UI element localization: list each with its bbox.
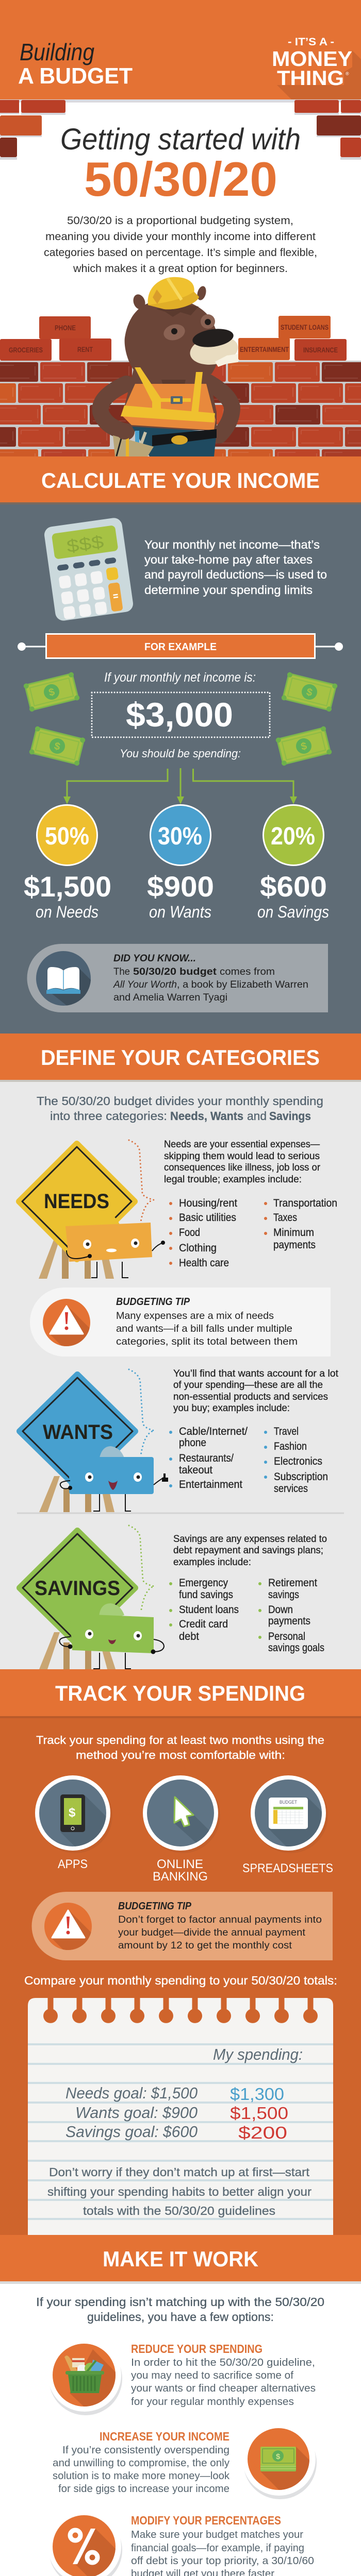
hard hat bbox=[148, 277, 199, 309]
option: increase your income bbox=[53, 2428, 317, 2499]
icon: cash stack: $ bbox=[276, 2452, 281, 2461]
callout: did you know: All Your Worth bbox=[113, 979, 177, 990]
notepad note: shifting your spending habits to better align your bbox=[47, 2185, 311, 2198]
wants split bbox=[147, 805, 214, 921]
handwritten amounts bbox=[230, 2084, 288, 2142]
icon: phone bbox=[60, 1794, 85, 1832]
needs split bbox=[24, 805, 111, 921]
savings description bbox=[173, 1534, 327, 1568]
method: spreadsheets bbox=[243, 1775, 333, 1872]
wants list: takeout bbox=[179, 1464, 212, 1476]
make it work intro: If your spending isn’t matching up with the 50/30/20 bbox=[36, 2295, 324, 2309]
needs sign character: NEEDS bbox=[44, 1190, 109, 1213]
my spending table: Wants goal: $900 bbox=[75, 2104, 198, 2122]
icon: warning bbox=[43, 1299, 90, 1346]
needs description: skipping them would lead to serious bbox=[164, 1151, 320, 1162]
intro paragraph bbox=[44, 215, 317, 275]
make it work intro: guidelines, you have a few options: bbox=[87, 2310, 274, 2324]
brick: phone: PHONE bbox=[55, 324, 76, 332]
notepad note: totals with the 50/30/20 guidelines bbox=[83, 2204, 275, 2217]
needs list: Housing/rent bbox=[179, 1197, 237, 1209]
callout: budgeting tip 1: categories, split its total between them bbox=[116, 1336, 298, 1347]
icon: calculator: $$$ bbox=[65, 532, 105, 556]
monthly income example bbox=[92, 670, 270, 737]
trousers and belt bbox=[132, 427, 217, 456]
option: modify your percentages: financial goals—for example, if paying bbox=[131, 2543, 304, 2554]
categories intro: Savings bbox=[269, 1109, 311, 1123]
wants list: phone bbox=[179, 1437, 206, 1449]
make it work intro bbox=[36, 2295, 324, 2324]
savings list: debt bbox=[179, 1631, 199, 1642]
income explanation text: and payroll deductions—is used to bbox=[144, 568, 327, 581]
icon: budget spreadsheet bbox=[269, 1798, 308, 1829]
method: online banking: ONLINE bbox=[157, 1857, 203, 1871]
icon: budget spreadsheet: BUDGET bbox=[280, 1800, 297, 1805]
section band: track your spending bbox=[0, 1669, 361, 1716]
callout: did you know: and Amelia Warren Tyagi bbox=[113, 992, 227, 1003]
savings list: payments bbox=[268, 1615, 310, 1627]
decorative corner bricks bbox=[0, 99, 361, 160]
needs split: on Needs bbox=[36, 903, 99, 921]
section band: define your categories bbox=[0, 1033, 361, 1080]
option: modify your percentages: Make sure your budget matches your bbox=[131, 2529, 303, 2540]
wants list bbox=[169, 1426, 328, 1495]
option: increase your income: INCREASE YOUR INCOME bbox=[100, 2430, 229, 2443]
safety vest bbox=[121, 367, 216, 430]
my spending table: My spending: bbox=[213, 2045, 303, 2063]
icon: grocery basket bbox=[50, 2344, 122, 2415]
icon: calculator bbox=[43, 517, 134, 622]
icon: cash stack bbox=[244, 2428, 317, 2499]
needs list: Health care bbox=[179, 1257, 229, 1269]
categories intro: Wants bbox=[210, 1109, 243, 1123]
intro paragraph: which makes it a great option for beginners. bbox=[73, 263, 288, 275]
wants sign character: WANTS bbox=[43, 1421, 113, 1444]
brick: groceries bbox=[0, 339, 52, 361]
savings list: Personal bbox=[268, 1631, 305, 1642]
header title: Building bbox=[20, 39, 94, 65]
callout: budgeting tip 2: your budget—divide the annual payment bbox=[118, 1927, 306, 1938]
savings split bbox=[257, 805, 329, 921]
brick: entertainment: ENTERTAINMENT bbox=[240, 345, 289, 353]
tracking intro: method you’re most comfortable with: bbox=[76, 1749, 285, 1761]
header title: A BUDGET bbox=[18, 63, 133, 89]
panel: make it work bbox=[0, 2235, 361, 2576]
needs split: 50% bbox=[45, 823, 89, 850]
needs description bbox=[164, 1139, 321, 1185]
for example banner: FOR EXAMPLE bbox=[144, 641, 217, 653]
needs split: $1,500 bbox=[24, 870, 111, 903]
wants list: Electronics bbox=[274, 1455, 322, 1467]
for example banner bbox=[18, 634, 343, 658]
income explanation text: determine your spending limits bbox=[144, 583, 313, 597]
monthly income example: $3,000 bbox=[126, 696, 233, 734]
logo: It's a Money Thing: MONEY bbox=[272, 47, 352, 71]
my spending table: Needs goal: $1,500 bbox=[65, 2084, 198, 2102]
tool pouch bbox=[113, 424, 154, 456]
needs list: Basic utilities bbox=[179, 1212, 236, 1224]
callout: budgeting tip 2: amount by 12 to get the monthly cost bbox=[118, 1940, 292, 1951]
compare heading: Compare your monthly spending to your 50/30/20 totals: bbox=[24, 1974, 337, 1987]
savings description: debt repayment and savings plans; bbox=[173, 1545, 323, 1556]
handwritten amounts: $200 bbox=[238, 2123, 287, 2142]
wants description: non-essential products and services bbox=[173, 1392, 328, 1402]
logo: It's a Money Thing bbox=[272, 36, 361, 99]
title bbox=[60, 123, 301, 206]
wants description: you buy; examples include: bbox=[173, 1403, 290, 1414]
icon: book bbox=[36, 951, 91, 1006]
wants list: Restaurants/ bbox=[179, 1452, 234, 1464]
wants description bbox=[173, 1368, 339, 1414]
method: online banking: BANKING bbox=[153, 1870, 208, 1884]
section band: make it work bbox=[0, 2235, 361, 2281]
callout: budgeting tip 2: Don’t forget to factor annual payments into bbox=[118, 1914, 322, 1925]
panel: track your spending bbox=[0, 1669, 361, 2235]
needs list: Clothing bbox=[179, 1242, 217, 1254]
needs list bbox=[169, 1197, 337, 1269]
callout: budgeting tip 1: and wants—if a bill falls under multiple bbox=[116, 1323, 292, 1334]
you should be spending: You should be spending: bbox=[120, 747, 241, 760]
panel: define your categories bbox=[0, 1033, 361, 1669]
panel: calculate your income bbox=[0, 502, 361, 1033]
option: increase your income: solution is to make more money—look bbox=[53, 2470, 230, 2482]
option: reduce your spending: REDUCE YOUR SPENDING bbox=[131, 2342, 262, 2355]
section band: make it work: MAKE IT WORK bbox=[103, 2247, 258, 2271]
icon: cursor bbox=[174, 1797, 193, 1826]
intro paragraph: categories based on percentage. It’s simple and flexible, bbox=[44, 247, 317, 259]
intro paragraph: meaning you divide your monthly income into different bbox=[45, 231, 316, 243]
wants list: Entertainment bbox=[179, 1479, 242, 1490]
savings split: 20% bbox=[271, 823, 315, 850]
callout: did you know: comes from bbox=[220, 967, 275, 977]
brick: insurance: INSURANCE bbox=[303, 346, 338, 354]
notepad note: Don’t worry if they don’t match up at first—start bbox=[49, 2165, 310, 2179]
title: Getting started with bbox=[60, 123, 301, 156]
option: modify your percentages: MODIFY YOUR PERCENTAGES bbox=[131, 2514, 281, 2527]
needs list: Food bbox=[179, 1227, 200, 1239]
brick: insurance bbox=[294, 339, 347, 361]
option: reduce your spending: your wants or find cheaper alternatives bbox=[131, 2383, 316, 2394]
option: increase your income: If you’re consistently overspending bbox=[62, 2445, 229, 2456]
icon: money bills bbox=[23, 672, 338, 766]
callout: budgeting tip 1 bbox=[30, 1287, 331, 1357]
savings description: examples include: bbox=[173, 1557, 251, 1568]
brick: student loans bbox=[278, 316, 331, 338]
icon: percent sign bbox=[50, 2515, 122, 2576]
handwritten amounts: $1,500 bbox=[230, 2104, 288, 2123]
wants split: on Wants bbox=[149, 903, 211, 921]
brick: rent: RENT bbox=[77, 345, 93, 353]
brick wall bbox=[0, 361, 361, 469]
savings description: Savings are any expenses related to bbox=[173, 1534, 327, 1545]
option: modify your percentages: off debt is your top priority, a 30/10/60 bbox=[131, 2555, 314, 2567]
wants list: Fashion bbox=[274, 1440, 307, 1452]
icon: warning bbox=[44, 1903, 92, 1950]
callout: budgeting tip 2: BUDGETING TIP bbox=[118, 1901, 192, 1912]
savings sign character bbox=[20, 1526, 164, 1669]
monthly income example: If your monthly net income is: bbox=[104, 670, 256, 685]
income explanation text: your take-home pay after taxes bbox=[144, 553, 313, 566]
callout: budgeting tip 1: Many expenses are a mix of needs bbox=[116, 1310, 274, 1321]
option: reduce your spending: for your regular monthly expenses bbox=[131, 2396, 294, 2408]
needs list: Minimum bbox=[273, 1227, 314, 1239]
tracking intro: Track your spending for at least two months using the bbox=[36, 1734, 324, 1747]
savings sign character: SAVINGS bbox=[35, 1577, 120, 1600]
my spending table: Savings goal: $600 bbox=[65, 2123, 198, 2141]
savings list bbox=[169, 1577, 324, 1654]
intro paragraph: 50/30/20 is a proportional budgeting system, bbox=[67, 215, 293, 227]
section band: define your categories: DEFINE YOUR CATEGORIES bbox=[41, 1045, 320, 1070]
needs list: payments bbox=[273, 1239, 316, 1251]
callout: budgeting tip 1: BUDGETING TIP bbox=[116, 1296, 190, 1308]
wants description: of your spending—these are all the bbox=[173, 1380, 323, 1391]
wants list: Travel bbox=[274, 1426, 299, 1437]
section band: calculate your income bbox=[0, 456, 361, 502]
savings list: fund savings bbox=[179, 1589, 233, 1601]
income explanation text: Your monthly net income—that’s bbox=[144, 538, 320, 551]
beaver mascot bbox=[101, 277, 240, 456]
savings split: $600 bbox=[260, 870, 327, 903]
option: increase your income: and unwilling to compromise, the only bbox=[53, 2458, 229, 2469]
savings list: Retirement bbox=[268, 1577, 317, 1589]
section band: calculate your income: CALCULATE YOUR INCOME bbox=[41, 468, 320, 493]
option: increase your income: for side gigs to increase your income bbox=[58, 2483, 229, 2495]
tracking intro bbox=[36, 1734, 324, 1761]
brick: rent bbox=[59, 338, 111, 361]
savings split: on Savings bbox=[257, 903, 329, 921]
wants list: Subscription bbox=[274, 1471, 328, 1483]
categories intro: The 50/30/20 budget divides your monthly spending bbox=[37, 1094, 323, 1108]
notepad bbox=[28, 1998, 333, 2235]
option: reduce your spending: In order to hit the 50/30/20 guideline, bbox=[131, 2357, 315, 2368]
wants description: You’ll find that wants account for a lot bbox=[173, 1368, 339, 1379]
brick: student loans: STUDENT LOANS bbox=[281, 323, 329, 331]
categories intro bbox=[37, 1094, 323, 1123]
logo: It's a Money Thing: THING bbox=[277, 67, 344, 90]
categories intro: and bbox=[247, 1109, 267, 1123]
brick: phone bbox=[39, 316, 91, 339]
method: apps bbox=[35, 1775, 112, 1868]
savings list: savings bbox=[268, 1589, 299, 1601]
savings list: savings goals bbox=[268, 1642, 324, 1654]
notepad note bbox=[47, 2165, 311, 2217]
method: apps: APPS bbox=[58, 1857, 88, 1871]
callout: did you know bbox=[27, 944, 328, 1012]
option: reduce your spending bbox=[50, 2344, 316, 2415]
section band: track your spending: TRACK YOUR SPENDING bbox=[55, 1681, 305, 1705]
option: modify your percentages bbox=[48, 2510, 314, 2576]
option: reduce your spending: you may need to sacrifice some of bbox=[131, 2370, 293, 2381]
labelled bricks bbox=[0, 316, 347, 361]
needs description: consequences like illness, job loss or bbox=[164, 1162, 321, 1173]
callout: did you know: , a book by Elizabeth Warren bbox=[177, 979, 308, 990]
wants split: 30% bbox=[158, 823, 202, 850]
arrows to percentages bbox=[63, 768, 297, 804]
categories intro: Needs, bbox=[170, 1109, 207, 1123]
savings list: Down bbox=[268, 1604, 293, 1616]
wants list: services bbox=[274, 1483, 308, 1495]
notepad holes bbox=[43, 1998, 318, 2023]
needs description: Needs are your essential expenses— bbox=[164, 1139, 320, 1150]
method: spreadsheets: SPREADSHEETS bbox=[242, 1861, 333, 1875]
income explanation text bbox=[144, 538, 327, 597]
wants list: Cable/Internet/ bbox=[179, 1426, 248, 1437]
callout: did you know: The bbox=[113, 967, 130, 977]
needs list: Transportation bbox=[273, 1197, 337, 1209]
wants sign character bbox=[20, 1369, 168, 1512]
header band bbox=[0, 0, 361, 99]
my spending table bbox=[65, 2045, 303, 2141]
handwritten amounts: $1,300 bbox=[230, 2084, 284, 2104]
brick: groceries: GROCERIES bbox=[9, 346, 43, 354]
callout: did you know: 50/30/20 budget bbox=[133, 967, 217, 977]
logo: It's a Money Thing: - IT’S A - bbox=[288, 36, 334, 48]
needs sign character bbox=[19, 1140, 165, 1279]
needs description: legal trouble; examples include: bbox=[164, 1174, 302, 1185]
callout: did you know: DID YOU KNOW... bbox=[113, 953, 196, 964]
callout: budgeting tip 2 bbox=[32, 1892, 333, 1960]
header title bbox=[18, 39, 133, 89]
savings list: Emergency bbox=[179, 1577, 228, 1589]
logo: It's a Money Thing: ® bbox=[346, 71, 349, 76]
categories intro: into three categories: bbox=[50, 1109, 167, 1123]
savings list: Credit card bbox=[179, 1618, 228, 1630]
method: online banking bbox=[143, 1775, 220, 1880]
icon: phone: $ bbox=[69, 1806, 76, 1820]
needs list: Taxes bbox=[273, 1212, 297, 1224]
title: 50/30/20 bbox=[84, 152, 277, 206]
savings list: Student loans bbox=[179, 1604, 239, 1616]
wants split: $900 bbox=[147, 870, 214, 903]
brick: entertainment bbox=[238, 338, 290, 360]
